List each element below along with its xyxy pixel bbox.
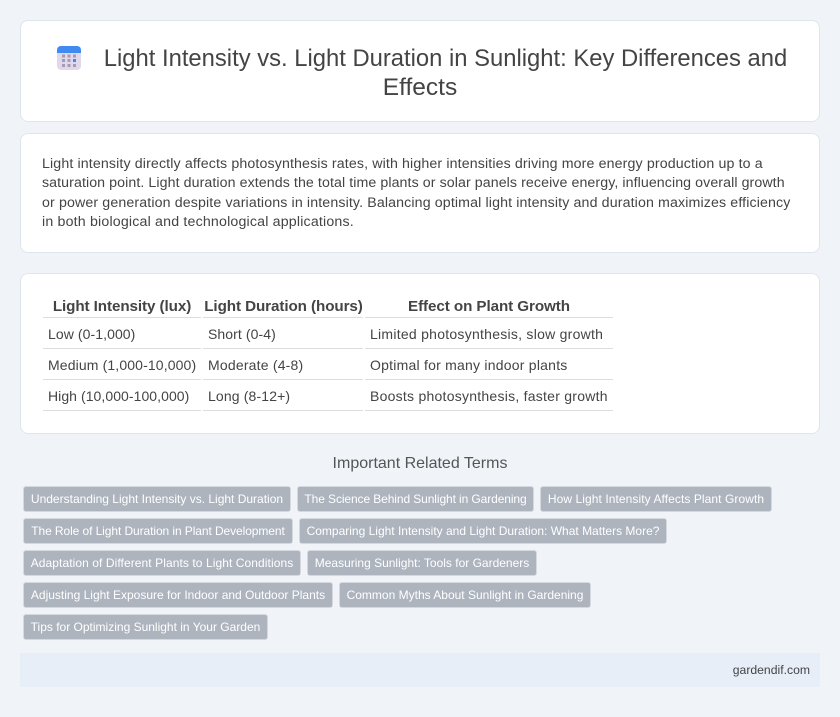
related term tags: The Science Behind Sunlight in Gardening xyxy=(304,492,527,506)
panel: header xyxy=(20,20,820,122)
comparison table: Effect on Plant Growth xyxy=(408,298,570,315)
title xyxy=(104,45,787,101)
related term tags: Adaptation of Different Plants to Light Conditions xyxy=(31,556,293,570)
comparison table xyxy=(43,298,613,411)
panel: table xyxy=(20,273,820,434)
comparison table: Light Duration (hours) xyxy=(204,298,363,315)
comparison table: Low (0-1,000) xyxy=(48,326,135,342)
comparison table: Light Intensity (lux) xyxy=(53,298,191,315)
related term tags: Adjusting Light Exposure for Indoor and Outdoor Plants xyxy=(31,588,325,602)
title: Effects xyxy=(383,74,457,101)
comparison table: Medium (1,000-10,000) xyxy=(48,357,196,373)
related term tags: Tips for Optimizing Sunlight in Your Garden xyxy=(31,620,260,634)
comparison table: Short (0-4) xyxy=(208,326,276,342)
panel: intro text xyxy=(20,133,820,253)
related term tags: Understanding Light Intensity vs. Light Duration xyxy=(31,492,283,506)
intro paragraph: in both biological and technological applications. xyxy=(42,214,354,230)
footer bar xyxy=(20,653,820,687)
intro paragraph: or power generation despite variations in intensity. Balancing optimal light intensity and duration maximizes efficiency xyxy=(42,195,790,211)
intro paragraph: Light intensity directly affects photosynthesis rates, with higher intensities driving more energy production up to a xyxy=(42,156,763,172)
comparison table: High (10,000-100,000) xyxy=(48,388,189,404)
icon: calendar xyxy=(57,46,81,70)
related term tags: Comparing Light Intensity and Light Duration: What Matters More? xyxy=(307,524,659,538)
comparison table: Optimal for many indoor plants xyxy=(370,357,568,373)
comparison table: Long (8-12+) xyxy=(208,388,290,404)
related term tags: Measuring Sunlight: Tools for Gardeners xyxy=(315,556,529,570)
related term tags: Common Myths About Sunlight in Gardening xyxy=(347,588,583,602)
related term tags: How Light Intensity Affects Plant Growth xyxy=(548,492,764,506)
footer credit: gardendif.com xyxy=(733,663,810,677)
related terms heading: Important Related Terms xyxy=(333,455,507,472)
related term tags: The Role of Light Duration in Plant Development xyxy=(31,524,285,538)
comparison table: Boosts photosynthesis, faster growth xyxy=(370,388,608,404)
comparison table: Limited photosynthesis, slow growth xyxy=(370,326,603,342)
intro paragraph: saturation point. Light duration extends the total time plants or solar panels receive energy, influencing overall growth xyxy=(42,175,785,191)
title: Light Intensity vs. Light Duration in Sunlight: Key Differences and xyxy=(104,45,787,72)
intro paragraph xyxy=(42,156,790,230)
comparison table: Moderate (4-8) xyxy=(208,357,303,373)
related term tags xyxy=(23,486,772,640)
